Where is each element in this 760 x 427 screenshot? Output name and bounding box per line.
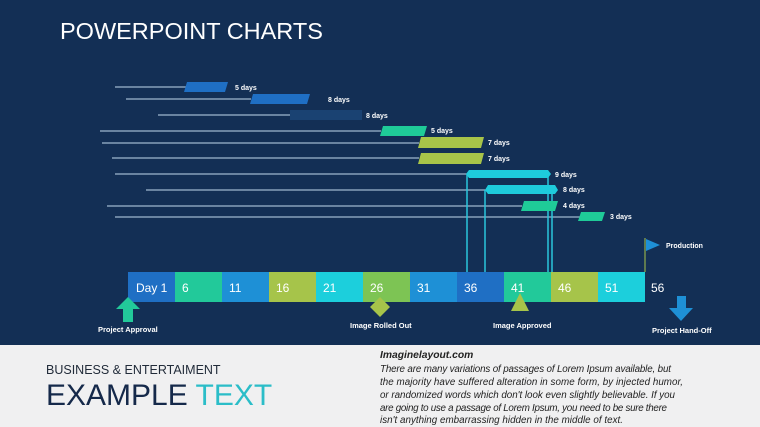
timeline: 16 xyxy=(276,281,290,295)
gantt chart: 8 days xyxy=(328,97,350,104)
gantt chart: 4 days xyxy=(563,203,585,210)
timeline: 26 xyxy=(370,281,384,295)
gantt chart: 3 days xyxy=(610,214,632,221)
timeline: 21 xyxy=(323,281,337,295)
gantt chart: 8 days xyxy=(366,113,388,120)
bottom panel xyxy=(0,345,760,427)
production flag: Production xyxy=(666,243,703,250)
description text: isn't anything embarrassing hidden in the middle of text. xyxy=(380,415,623,426)
production flag xyxy=(645,238,703,272)
description text: There are many variations of passages of Lorem Ipsum available, but xyxy=(380,364,672,375)
gantt chart: 8 days xyxy=(563,187,585,194)
timeline: Day 1 xyxy=(136,281,168,295)
timeline xyxy=(128,272,665,302)
subtitle: BUSINESS & ENTERTAIMENT xyxy=(46,363,221,377)
milestone: image rolled out xyxy=(350,297,412,330)
milestone: project hand-off xyxy=(652,296,712,335)
description text: Imaginelayout.com xyxy=(380,350,473,361)
timeline: 51 xyxy=(605,281,619,295)
gantt chart: 7 days xyxy=(488,156,510,163)
title: POWERPOINT CHARTS xyxy=(60,18,323,44)
milestone: project approval: Project Approval xyxy=(98,325,158,334)
timeline: 41 xyxy=(511,281,525,295)
gantt chart: 5 days xyxy=(235,85,257,92)
milestone: image approved: Image Approved xyxy=(493,321,552,330)
timeline: 36 xyxy=(464,281,478,295)
timeline: 31 xyxy=(417,281,431,295)
heading: example text: EXAMPLE TEXT xyxy=(46,379,272,412)
description text: or randomized words which don't look even slightly believable. If you xyxy=(380,390,676,401)
gantt chart xyxy=(100,82,632,272)
milestone: image approved xyxy=(493,293,552,330)
gantt chart: 7 days xyxy=(488,140,510,147)
timeline: 46 xyxy=(558,281,572,295)
milestone: project hand-off: Project Hand-Off xyxy=(652,326,712,335)
description text: are going to use a passage of Lorem Ipsum, you need to be sure there xyxy=(380,403,668,414)
timeline: 6 xyxy=(182,281,189,295)
gantt chart: 9 days xyxy=(555,172,577,179)
timeline: 11 xyxy=(229,281,242,295)
milestone: project approval xyxy=(98,297,158,334)
vertical connectors xyxy=(467,174,552,272)
timeline: 56 xyxy=(651,281,665,295)
description text xyxy=(380,350,683,426)
milestone: image rolled out: Image Rolled Out xyxy=(350,321,412,330)
description text: the majority have suffered alteration in some form, by injected humor, xyxy=(380,377,683,388)
gantt chart: 5 days xyxy=(431,128,453,135)
